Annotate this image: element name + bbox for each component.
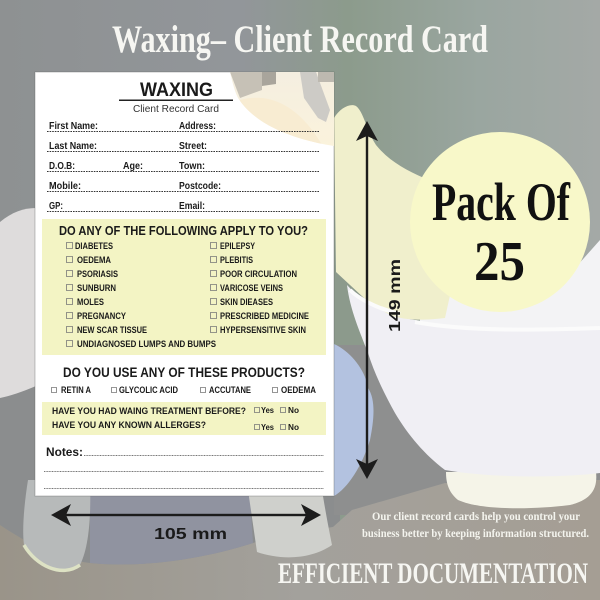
personal details form: Email: bbox=[179, 201, 205, 212]
products section: OEDEMA bbox=[281, 385, 317, 395]
height arrow: 149 mm: 149 mm bbox=[387, 259, 404, 332]
bowl base bbox=[446, 472, 596, 508]
bowl bbox=[347, 285, 600, 476]
conditions heading: DO ANY OF THE FOLLOWING APPLY TO YOU? bbox=[59, 223, 308, 238]
blue towel bbox=[334, 344, 374, 496]
condition list: MOLES bbox=[77, 297, 104, 307]
products section: RETIN A bbox=[61, 385, 92, 395]
soap wedge bbox=[334, 105, 460, 320]
personal details form: First Name: bbox=[49, 121, 98, 132]
lower wall bbox=[0, 385, 340, 565]
table centre tint bbox=[90, 496, 253, 564]
condition list: POOR CIRCULATION bbox=[220, 269, 297, 279]
condition list: VARICOSE VEINS bbox=[220, 283, 283, 293]
bowl rim highlight bbox=[350, 290, 600, 330]
card corner photo bbox=[230, 72, 334, 150]
treatment questions panel: Yes bbox=[261, 405, 274, 415]
personal details form: Street: bbox=[179, 141, 207, 152]
glass tube right bbox=[248, 490, 332, 557]
white towel bbox=[0, 208, 36, 398]
personal details form: D.O.B: bbox=[49, 161, 75, 172]
card heading bbox=[119, 80, 233, 115]
card heading: Client Record Card bbox=[133, 103, 219, 115]
condition list: PLEBITIS bbox=[220, 255, 253, 265]
personal details form: Town: bbox=[179, 161, 205, 172]
treatment questions panel: HAVE YOU HAD WAING TREATMENT BEFORE? bbox=[52, 406, 246, 416]
treatment questions panel: Yes bbox=[261, 422, 274, 432]
notes bbox=[44, 445, 324, 488]
tabletop bbox=[0, 480, 600, 600]
personal details form: GP: bbox=[49, 201, 63, 212]
products section: ACCUTANE bbox=[209, 385, 251, 395]
card sheet bbox=[35, 72, 334, 496]
condition list: SKIN DIEASES bbox=[220, 297, 273, 307]
treatment questions panel: No bbox=[288, 405, 299, 415]
record card bbox=[35, 72, 334, 496]
width arrow: 105 mm bbox=[51, 504, 321, 543]
personal details form: Age: bbox=[123, 161, 143, 172]
condition list: HYPERSENSITIVE SKIN bbox=[220, 325, 306, 335]
condition list: NEW SCAR TISSUE bbox=[77, 325, 147, 335]
treatment questions panel: No bbox=[288, 422, 299, 432]
condition list: EPILEPSY bbox=[220, 241, 255, 251]
conditions panel bbox=[42, 219, 326, 355]
pack of 25 badge: 25 bbox=[474, 231, 525, 293]
products section: GLYCOLIC ACID bbox=[119, 385, 178, 395]
title: Waxing– Client Record Card bbox=[112, 18, 488, 61]
condition list bbox=[75, 241, 309, 349]
condition list: UNDIAGNOSED LUMPS AND BUMPS bbox=[77, 339, 216, 349]
card heading: WAXING bbox=[140, 80, 213, 101]
condition list: PSORIASIS bbox=[77, 269, 118, 279]
treatment questions panel: HAVE YOU ANY KNOWN ALLERGES? bbox=[52, 420, 206, 430]
products section: DO YOU USE ANY OF THESE PRODUCTS? bbox=[63, 365, 305, 380]
description text bbox=[362, 509, 589, 540]
personal details form bbox=[47, 121, 319, 212]
foam in bowl bbox=[420, 240, 600, 335]
condition list: SUNBURN bbox=[77, 283, 116, 293]
height arrow: 149 mm bbox=[356, 121, 404, 479]
description text: Our client record cards help you control your bbox=[372, 509, 581, 523]
condition list: PREGNANCY bbox=[77, 311, 126, 321]
personal details form: Address: bbox=[179, 121, 216, 132]
notes: Notes: bbox=[46, 445, 83, 459]
width arrow: 105 mm: 105 mm bbox=[154, 526, 227, 543]
products section bbox=[52, 365, 317, 395]
treatment questions panel bbox=[42, 402, 326, 435]
glass tube left bbox=[23, 480, 90, 570]
pack of 25 badge bbox=[410, 132, 590, 312]
condition checkboxes bbox=[66, 242, 216, 346]
condition list: DIABETES bbox=[75, 241, 113, 251]
condition list: PRESCRIBED MEDICINE bbox=[220, 311, 309, 321]
personal details form: Mobile: bbox=[49, 181, 81, 192]
personal details form: Last Name: bbox=[49, 141, 97, 152]
personal details form: Postcode: bbox=[179, 181, 221, 192]
condition list: OEDEMA bbox=[77, 255, 112, 265]
